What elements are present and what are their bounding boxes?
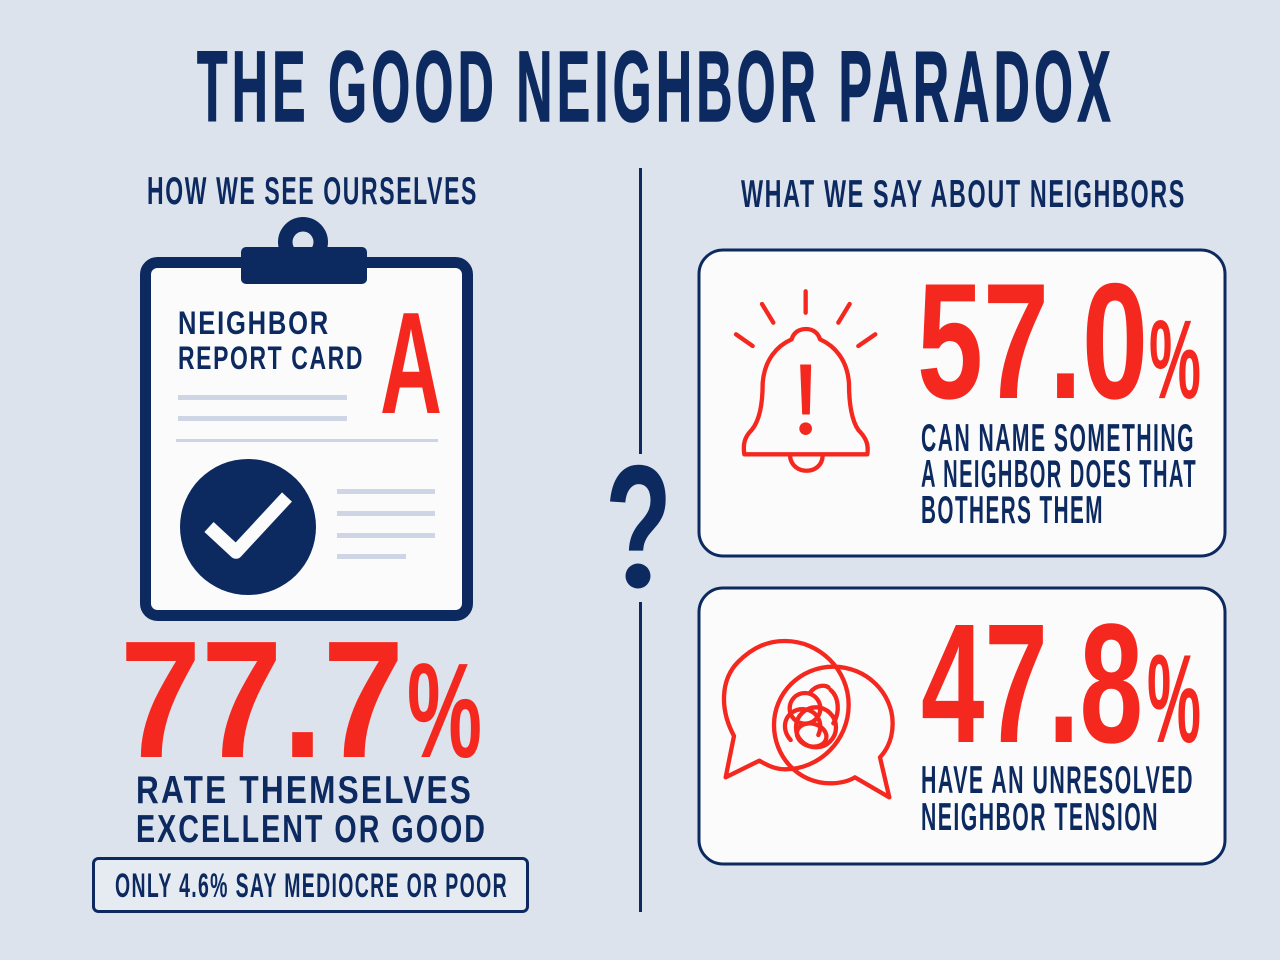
statistic: 57.0%: % [1149, 297, 1201, 422]
clipboard heading: REPORT CARD [178, 340, 364, 376]
heading: how we see ourselves: HOW WE SEE OURSELVES [147, 170, 478, 213]
grade letter A: A [380, 282, 442, 444]
statistic: 57.0%: 57.0 [917, 249, 1148, 433]
panel: how we see ourselves [94, 170, 528, 912]
panel: what we say about neighbors [699, 173, 1225, 864]
statistic: 77.7%: % [407, 635, 482, 786]
callout: only 4.6% [94, 858, 528, 912]
icon: alarm bell [736, 291, 875, 471]
icon: overlapping speech bubbles with tangled knot [724, 641, 893, 797]
card: 47.8% [699, 588, 1225, 864]
statistic caption: BOTHERS THEM [921, 489, 1104, 532]
statistic caption: EXCELLENT OR GOOD [136, 808, 487, 851]
icon: check mark circle [180, 459, 316, 595]
center divider with question mark [610, 168, 666, 912]
statistic: 47.8%: 47.8 [921, 589, 1143, 779]
card: 47.8%: % [1147, 630, 1201, 769]
clipboard heading: NEIGHBOR [178, 305, 330, 341]
card: 57.0% [699, 249, 1225, 556]
clipboard heading [178, 305, 364, 376]
statistic caption [921, 417, 1197, 532]
icon: clipboard report card [146, 217, 468, 616]
statistic caption [136, 769, 487, 851]
statistic: 77.7%: 77.7 [120, 607, 404, 793]
statistic caption [921, 759, 1194, 839]
statistic caption: RATE THEMSELVES [136, 769, 473, 812]
center divider with question mark: ? [605, 430, 672, 625]
callout: only 4.6%: ONLY 4.6% SAY MEDIOCRE OR POOR [115, 867, 508, 905]
